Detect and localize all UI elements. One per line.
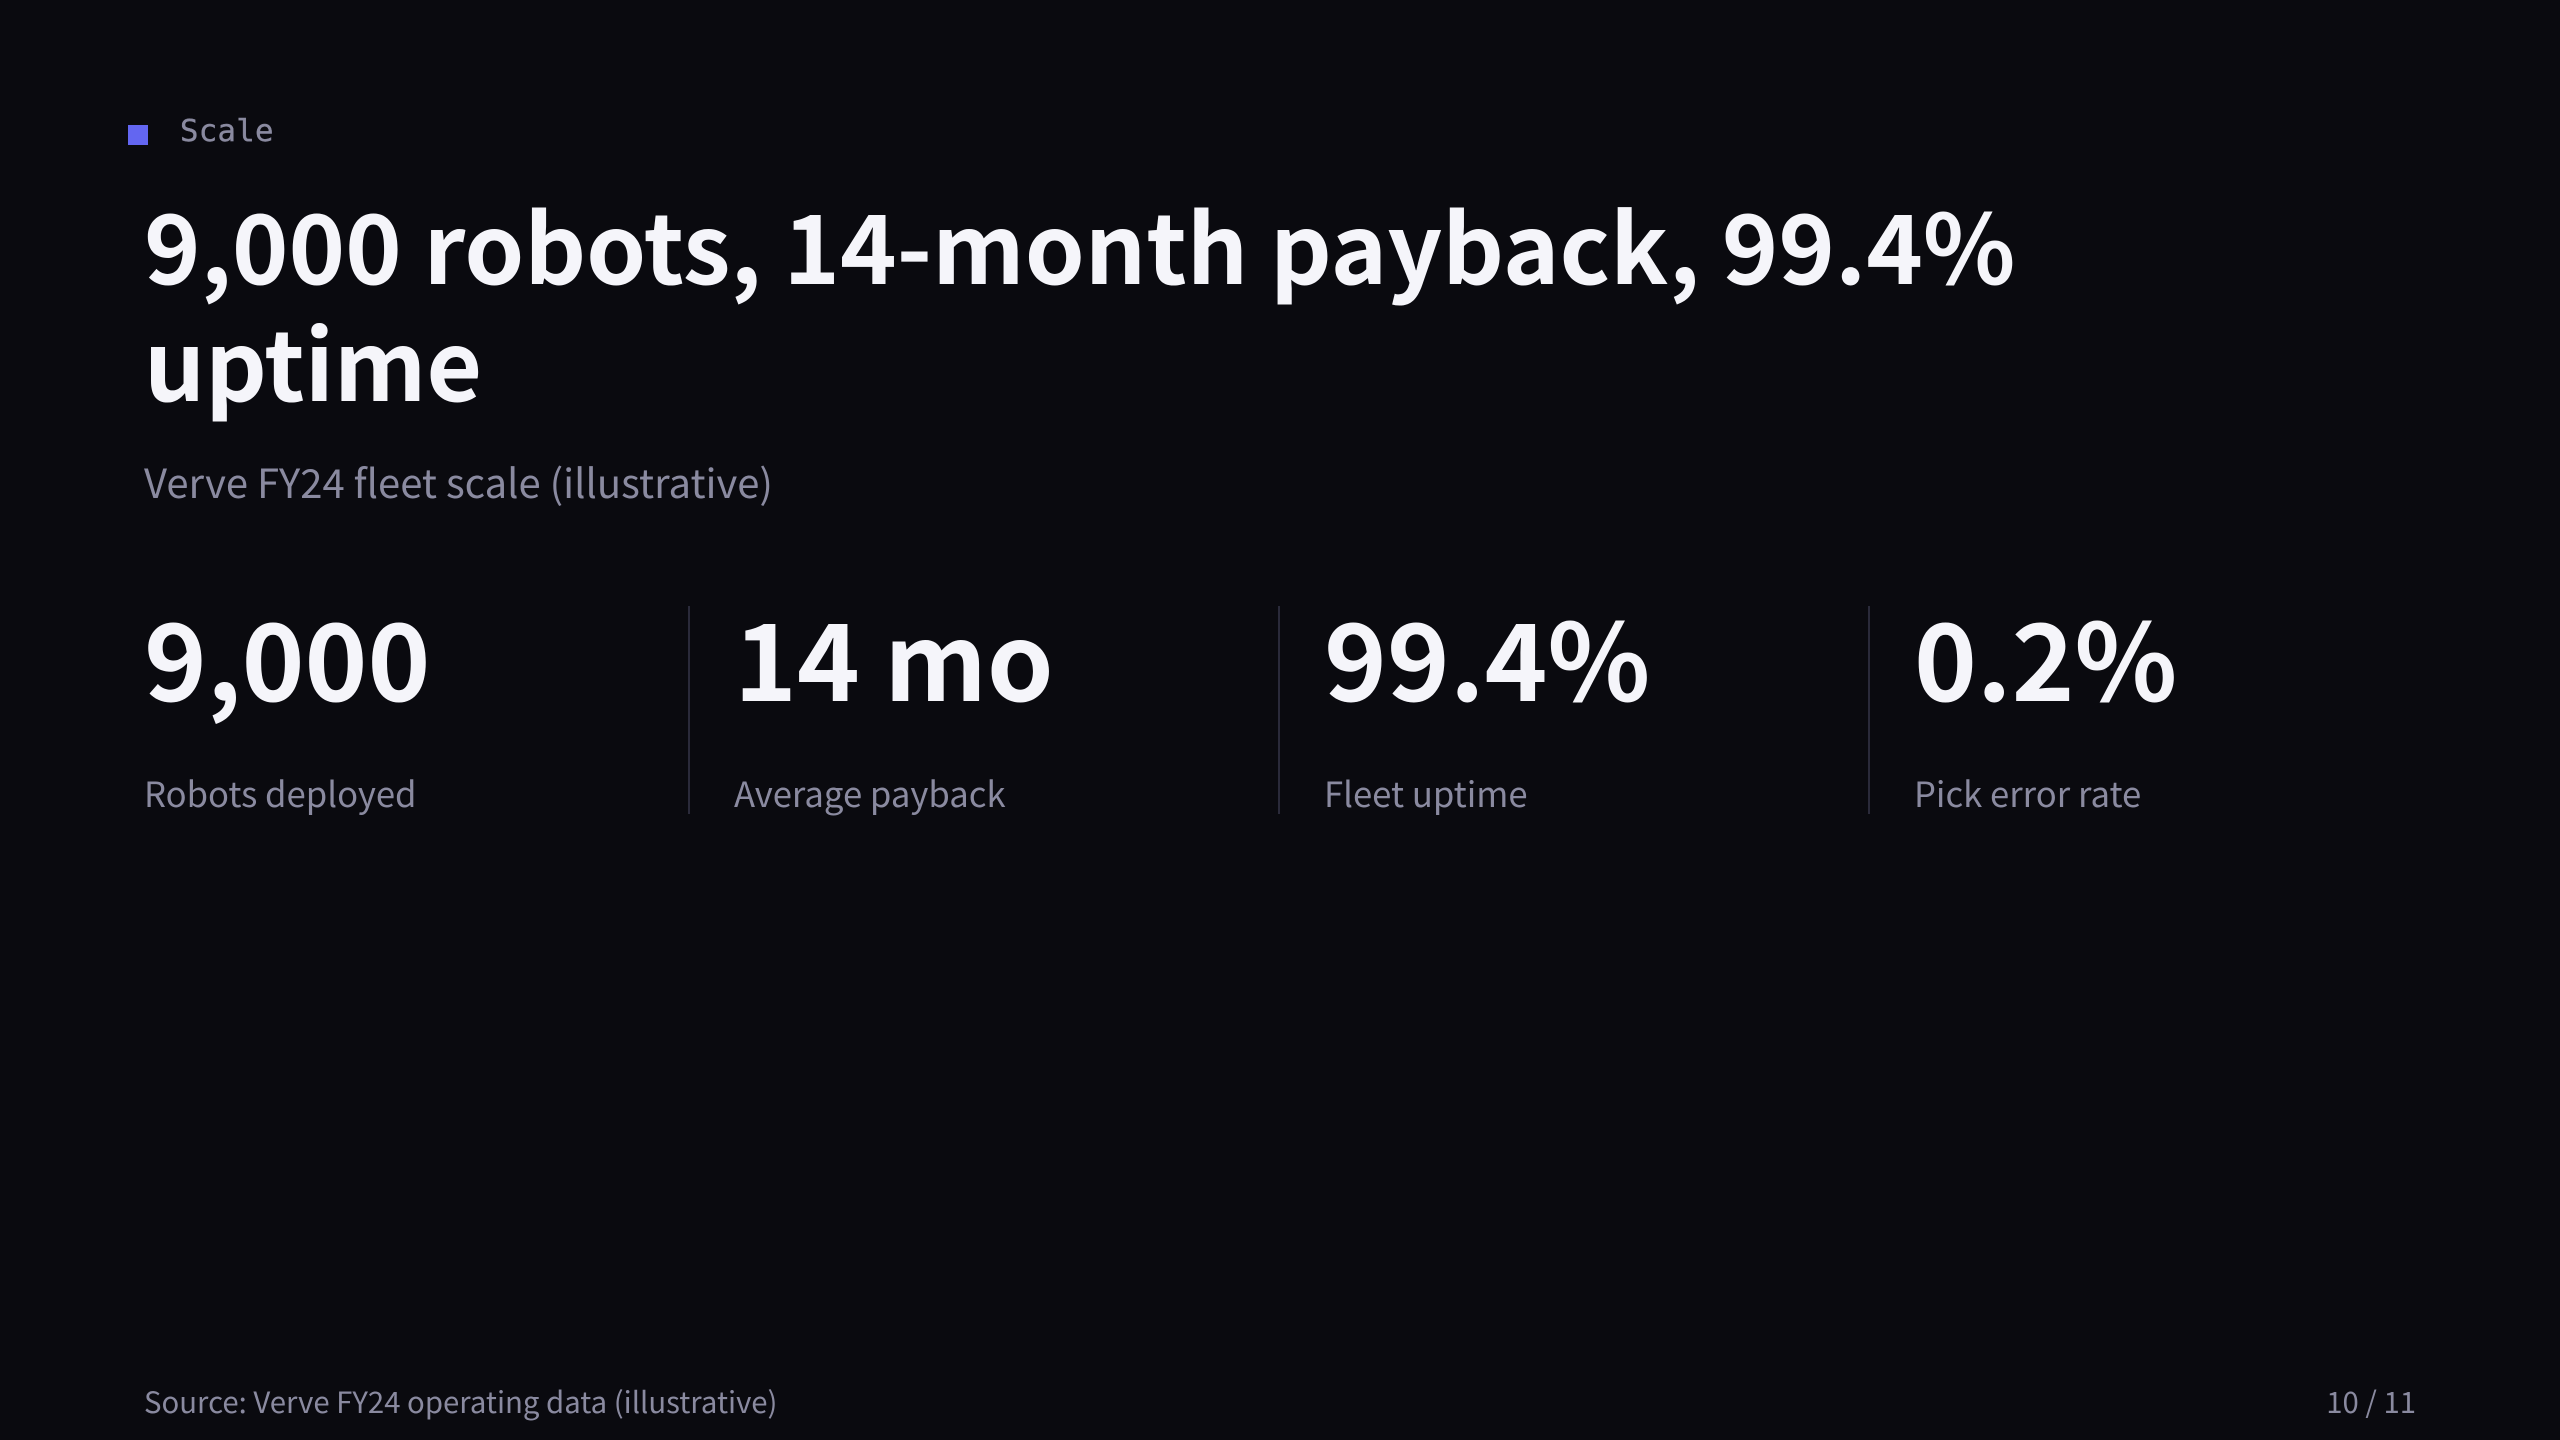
source note: Source: Verve FY24 operating data (illustrative)	[144, 1380, 777, 1422]
stat: average payback	[734, 577, 1054, 817]
section label: Scale	[180, 114, 274, 149]
value: 99.4%	[1324, 577, 1650, 732]
label: Fleet uptime	[1324, 767, 1528, 817]
value: 9,000	[144, 577, 430, 732]
value: 0.2%	[1914, 577, 2177, 732]
label: Average payback	[734, 767, 1006, 817]
title: uptime	[144, 290, 482, 429]
title: 9,000 robots, 14-month payback, 99.4%	[144, 173, 2015, 312]
stat: pick error rate	[1914, 577, 2177, 817]
subtitle: Verve FY24 fleet scale (illustrative)	[144, 452, 773, 510]
label: Pick error rate	[1914, 767, 2141, 817]
stat: fleet uptime	[1324, 577, 1650, 817]
page number: 10 / 11	[2326, 1380, 2416, 1422]
divider	[1868, 606, 1870, 814]
divider	[688, 606, 690, 814]
label: Robots deployed	[144, 767, 417, 817]
value: 14 mo	[734, 577, 1054, 732]
title	[144, 173, 2015, 429]
stat: robots deployed	[144, 577, 430, 817]
section marker	[128, 125, 148, 145]
divider	[1278, 606, 1280, 814]
